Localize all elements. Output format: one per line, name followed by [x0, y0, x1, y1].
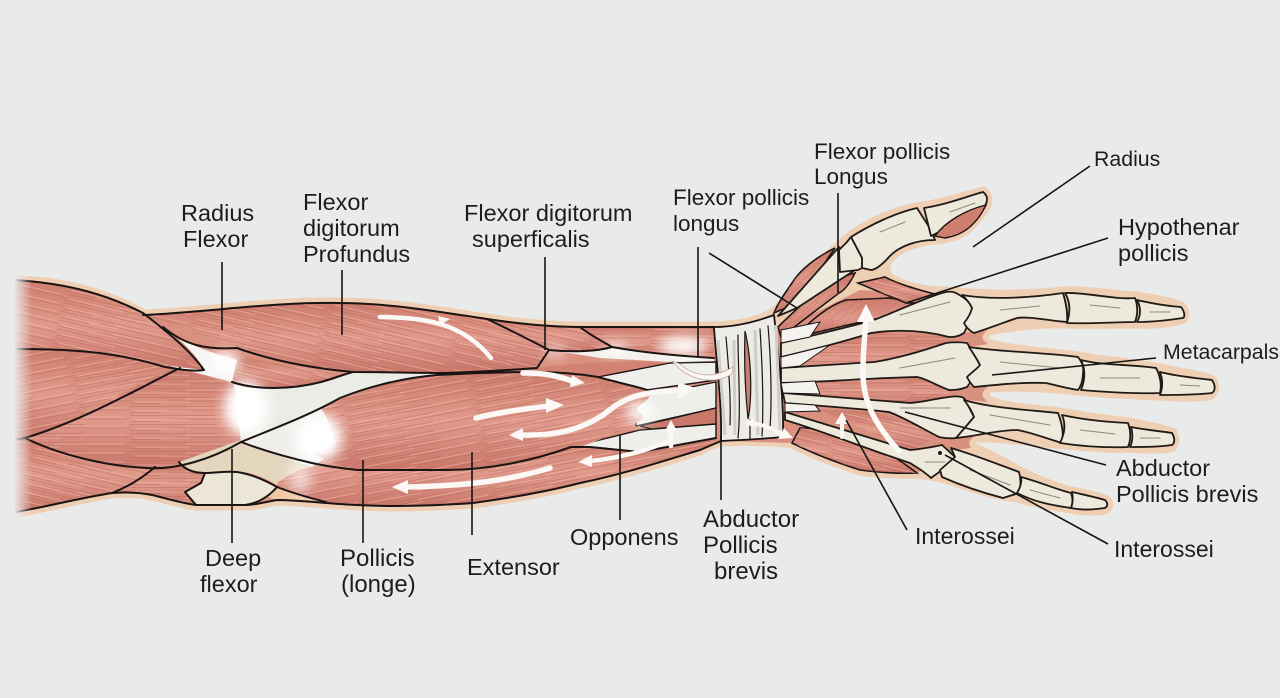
wrist tendons [571, 362, 716, 452]
tendon strip one [598, 362, 716, 390]
leader lines [222, 166, 1156, 544]
web tissue [950, 330, 988, 450]
label: Deep flexor: flexor [200, 571, 258, 597]
muscle: upper left belly [13, 280, 204, 371]
muscle: lower left belly [13, 438, 155, 512]
bone end [185, 472, 277, 505]
label: Flexor pollicis Longus top: Longus [814, 164, 888, 189]
label: Flexor digitorum Profundus: Profundus [303, 241, 410, 267]
arrow: band lower [745, 418, 793, 439]
muscle: small lower belly [112, 462, 205, 505]
tendon strip red [640, 408, 716, 431]
label: Flexor digitorum Profundus: digitorum [303, 215, 400, 241]
label: Flexor digitorum superficalis: superficalis [472, 226, 590, 252]
metacarpal three [783, 393, 974, 438]
arrow: top central [523, 373, 585, 387]
thumb long muscle [774, 248, 835, 313]
bone shading strokes [880, 203, 1200, 498]
arrow: long palm curve [857, 304, 899, 451]
bones [781, 192, 1215, 510]
tendon strands to metacarpals [781, 322, 830, 412]
carpal ligament band [714, 315, 783, 441]
ring phalanx proximal [956, 400, 1063, 443]
tendon: lower fan [241, 408, 345, 467]
tendon strip three [571, 424, 716, 452]
label: Radius Flexor: Radius [181, 200, 254, 226]
index phalanx proximal [962, 293, 1067, 333]
label: Abductor Pollicis brevis right: Abductor [1116, 455, 1210, 481]
arrow: wrist curve [672, 361, 733, 380]
thumb adductor muscle [778, 273, 855, 337]
label: Flexor pollicis Longus top: Flexor pollicis [814, 139, 950, 164]
label: Flexor pollicis longus: longus [673, 211, 739, 236]
metacarpal four [785, 412, 955, 478]
thumb nail muscle [935, 205, 986, 238]
index phalanx distal [1137, 300, 1184, 322]
palm muscle mid lower [820, 410, 939, 450]
label: Abductor Pollicis brevis right: Pollicis brevis [1116, 481, 1258, 507]
palm muscle lower [792, 428, 917, 473]
ring phalanx middle [1060, 415, 1130, 447]
tendon strip two [636, 382, 716, 426]
arrow: lower right hook [578, 420, 677, 467]
label: Hypothenar pollicis: pollicis [1118, 240, 1189, 266]
joint dot [938, 451, 942, 455]
little phalanx proximal [940, 448, 1020, 498]
label: Radius right: Radius [1094, 147, 1160, 171]
label: Pollicis longe: (longe) [341, 571, 416, 598]
little phalanx distal [1071, 492, 1107, 510]
label: Pollicis longe: Pollicis [340, 545, 415, 572]
thumb proximal bone [851, 208, 935, 270]
tendon: upper wrist [550, 346, 714, 366]
label: Metacarpals: Metacarpals [1163, 340, 1279, 364]
muscle: lower belly [277, 438, 716, 506]
peach fascia [268, 487, 326, 502]
tendon: central white fan [165, 327, 237, 382]
tendon highlights over muscle ends [211, 337, 707, 494]
middle phalanx proximal [967, 347, 1083, 390]
label: Opponens: Opponens [570, 524, 678, 550]
thumb metacarpal strip [778, 247, 858, 316]
thumb distal bone [924, 192, 987, 236]
label: Interossei lower right: Interossei [1114, 536, 1214, 562]
forearm contour lines [13, 280, 721, 512]
skin halo silhouette [16, 192, 1214, 512]
muscle: upper right belly [487, 319, 612, 351]
muscle: wrist flexor belly [580, 327, 714, 355]
arrow: long lower [392, 468, 550, 494]
arrow: central double [476, 398, 564, 418]
middle phalanx distal [1160, 372, 1215, 395]
little phalanx middle [1017, 477, 1072, 508]
movement arrows [380, 304, 899, 494]
middle phalanx middle [1081, 360, 1161, 393]
label: Interossei centre: Interossei [915, 523, 1015, 549]
label: Hypothenar pollicis: Hypothenar [1118, 214, 1240, 240]
band [714, 315, 783, 441]
thumb web muscle [858, 277, 938, 303]
label: Deep flexor: Deep [205, 545, 261, 571]
thumb carpal head [839, 237, 862, 272]
arm and hand illustration [6, 192, 1215, 520]
label: Flexor pollicis longus: Flexor pollicis [673, 185, 809, 210]
thenar muscle [796, 298, 924, 337]
muscle: centre left belly [25, 370, 242, 468]
label: Extensor: Extensor [467, 554, 560, 580]
index phalanx middle [1065, 293, 1137, 323]
palm muscle between fingers one [800, 333, 964, 383]
label: Abductor Pollicis brevis centre: Abductor [703, 506, 799, 533]
muscle: large central belly [312, 372, 649, 470]
beige elbow tissue [179, 440, 312, 485]
hand muscles [774, 247, 988, 473]
band shading [718, 325, 780, 435]
muscle: small middle belly [232, 356, 353, 388]
muscle base fill [16, 281, 965, 512]
tendon: central aponeurosis [234, 372, 446, 442]
label: Abductor Pollicis brevis centre: Pollicis [703, 532, 778, 559]
metacarpal one [781, 292, 972, 357]
label: Flexor digitorum Profundus: Flexor [303, 189, 368, 215]
ring phalanx distal [1130, 427, 1174, 447]
label: Radius Flexor: Flexor [183, 226, 248, 252]
muscle: upper forearm belly [145, 303, 549, 373]
palm muscle between fingers two [810, 377, 950, 403]
left edge fade [6, 270, 32, 520]
label: Flexor digitorum superficalis: Flexor digitorum [464, 200, 632, 226]
muscle: narrow strip [446, 362, 670, 377]
arrow: small palm [835, 412, 849, 437]
band grooves [726, 326, 771, 439]
label: Abductor Pollicis brevis centre: brevis [714, 558, 778, 585]
muscle: left middle belly [13, 349, 180, 440]
arrow: upper belly [380, 316, 491, 358]
arrow: S curve [509, 382, 698, 441]
band slit [745, 331, 751, 419]
metacarpal two [781, 342, 980, 390]
